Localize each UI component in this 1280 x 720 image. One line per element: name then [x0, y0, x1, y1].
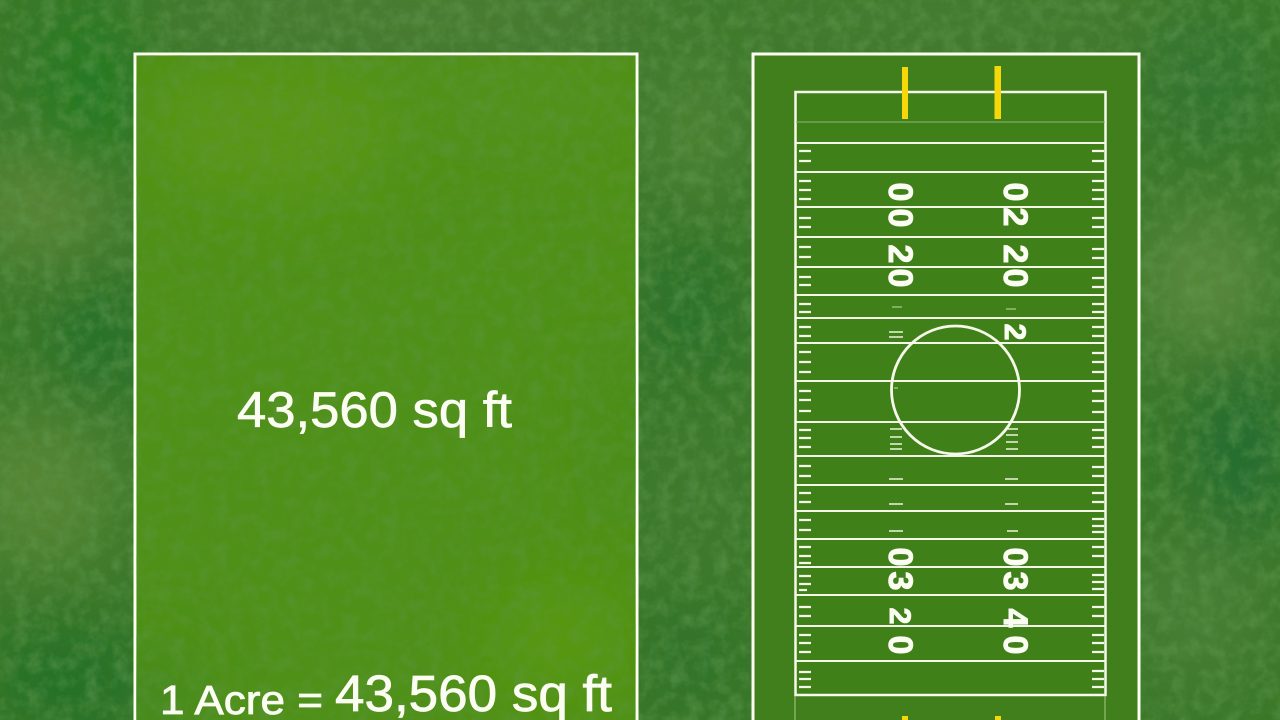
yard lines	[796, 143, 1105, 661]
bottom goal posts	[902, 716, 1001, 720]
yard numbers: upper: 0	[996, 183, 1034, 201]
end line	[796, 121, 1105, 123]
yard numbers: lower: 0	[996, 636, 1034, 654]
yard numbers: lower: 0	[881, 636, 919, 654]
yard numbers: lower: 3	[996, 572, 1034, 590]
yard numbers: lower: 2	[883, 608, 916, 624]
center circle	[892, 326, 1020, 454]
panel: one acre plot	[110, 54, 647, 720]
yard numbers: upper: 0	[881, 209, 919, 227]
yard numbers: upper: 0	[881, 183, 919, 201]
yard numbers: lower: 0	[881, 548, 919, 566]
panel: football field	[753, 54, 1139, 720]
yard numbers: upper: 0	[881, 269, 919, 287]
bottom end zone outline	[795, 696, 1105, 720]
yard numbers: upper: 2	[996, 208, 1034, 226]
yard numbers: lower: 3	[881, 572, 919, 590]
yard numbers: upper: 2	[996, 245, 1034, 263]
yard numbers: upper: 2	[881, 245, 919, 263]
yard numbers: lower: 0	[996, 548, 1034, 566]
inner hash marks	[889, 332, 1018, 531]
yard numbers: upper	[881, 183, 1034, 340]
area label: 43,560 sq ft	[237, 382, 512, 438]
yard numbers: upper: 0	[996, 269, 1034, 287]
right sideline hash marks	[1092, 151, 1104, 687]
left sideline hash marks	[799, 151, 811, 687]
caption: 1 acre equals	[160, 665, 612, 720]
faint inner hash marks	[892, 307, 1016, 388]
yard numbers: upper: 2	[998, 324, 1031, 340]
top goal posts	[902, 66, 1001, 119]
field boundary	[796, 92, 1106, 695]
yard numbers: lower	[881, 548, 1034, 654]
yard numbers: lower: 4	[996, 609, 1034, 628]
